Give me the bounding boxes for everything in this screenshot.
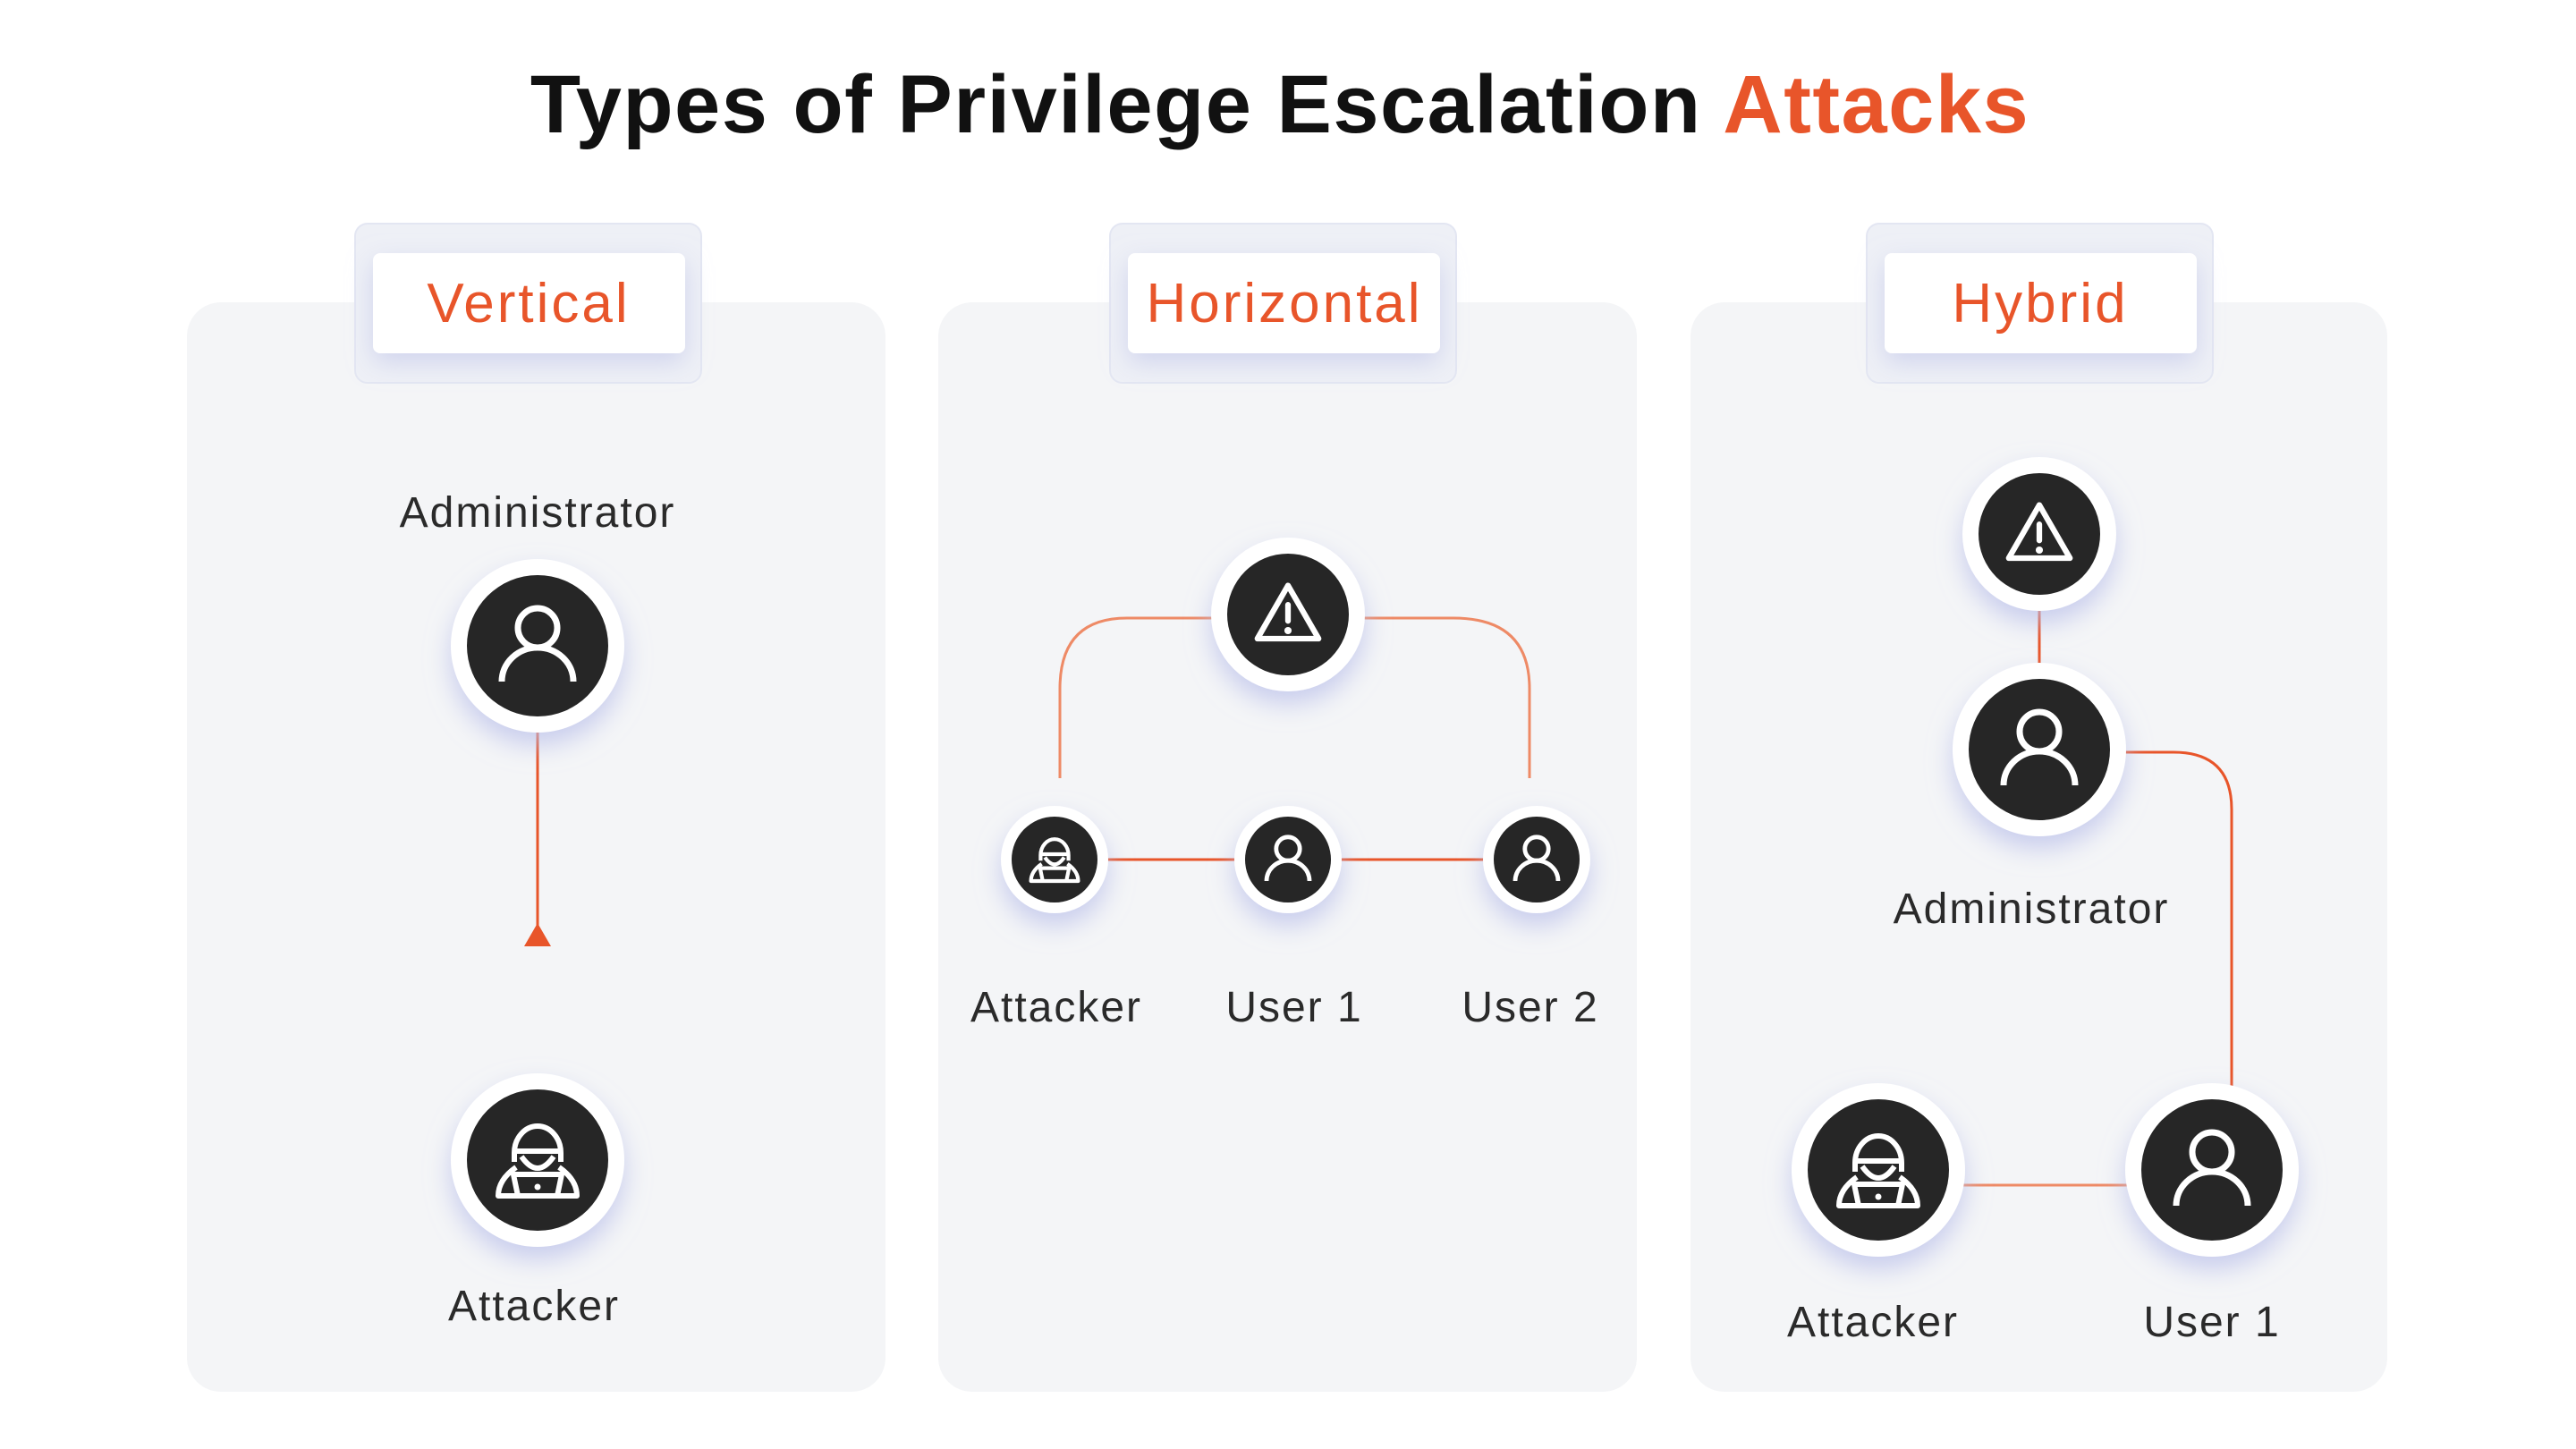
- tab: vertical: [355, 224, 701, 383]
- panel: hybrid: [1690, 224, 2387, 1392]
- tab: horizontal: Horizontal: [1146, 273, 1423, 335]
- icon: user 1: [1234, 806, 1342, 913]
- icon: attacker: [1792, 1083, 1965, 1257]
- title: Types of Privilege Escalation Attacks: [530, 59, 2029, 150]
- labels: horizontal: Attacker: [970, 984, 1142, 1031]
- label: attacker: Attacker: [448, 1283, 620, 1330]
- connector: attacker to user 2 via exploit: [1055, 618, 1537, 860]
- label: administrator: Administrator: [1894, 886, 2169, 933]
- tab: vertical: Vertical: [427, 273, 631, 335]
- icon: attacker: [451, 1073, 624, 1247]
- panel: vertical: [187, 224, 886, 1392]
- connectors: hybrid: [1950, 590, 2232, 1185]
- icon: attacker: [1001, 806, 1108, 913]
- labels: horizontal: [970, 984, 1599, 1031]
- panel: horizontal: [938, 224, 1637, 1392]
- labels: horizontal: User 2: [1462, 984, 1599, 1031]
- icon: administrator: [1953, 663, 2126, 836]
- tab: hybrid: Hybrid: [1952, 273, 2129, 335]
- labels: horizontal: User 1: [1225, 984, 1363, 1031]
- labels: hybrid bottom: [1787, 1299, 2281, 1346]
- label: administrator: Administrator: [400, 489, 675, 537]
- tab: horizontal: [1110, 224, 1456, 383]
- icon: administrator: [451, 559, 624, 733]
- arrow: attacker to administrator: [524, 732, 551, 1038]
- icon: user 1: [2125, 1083, 2299, 1257]
- icon: warning: [1962, 457, 2116, 611]
- icon: warning: [1211, 538, 1365, 691]
- labels: hybrid bottom: User 1: [2143, 1299, 2281, 1346]
- labels: hybrid bottom: Attacker: [1787, 1299, 1959, 1346]
- tab: hybrid: [1867, 224, 2213, 383]
- icon: user 2: [1483, 806, 1590, 913]
